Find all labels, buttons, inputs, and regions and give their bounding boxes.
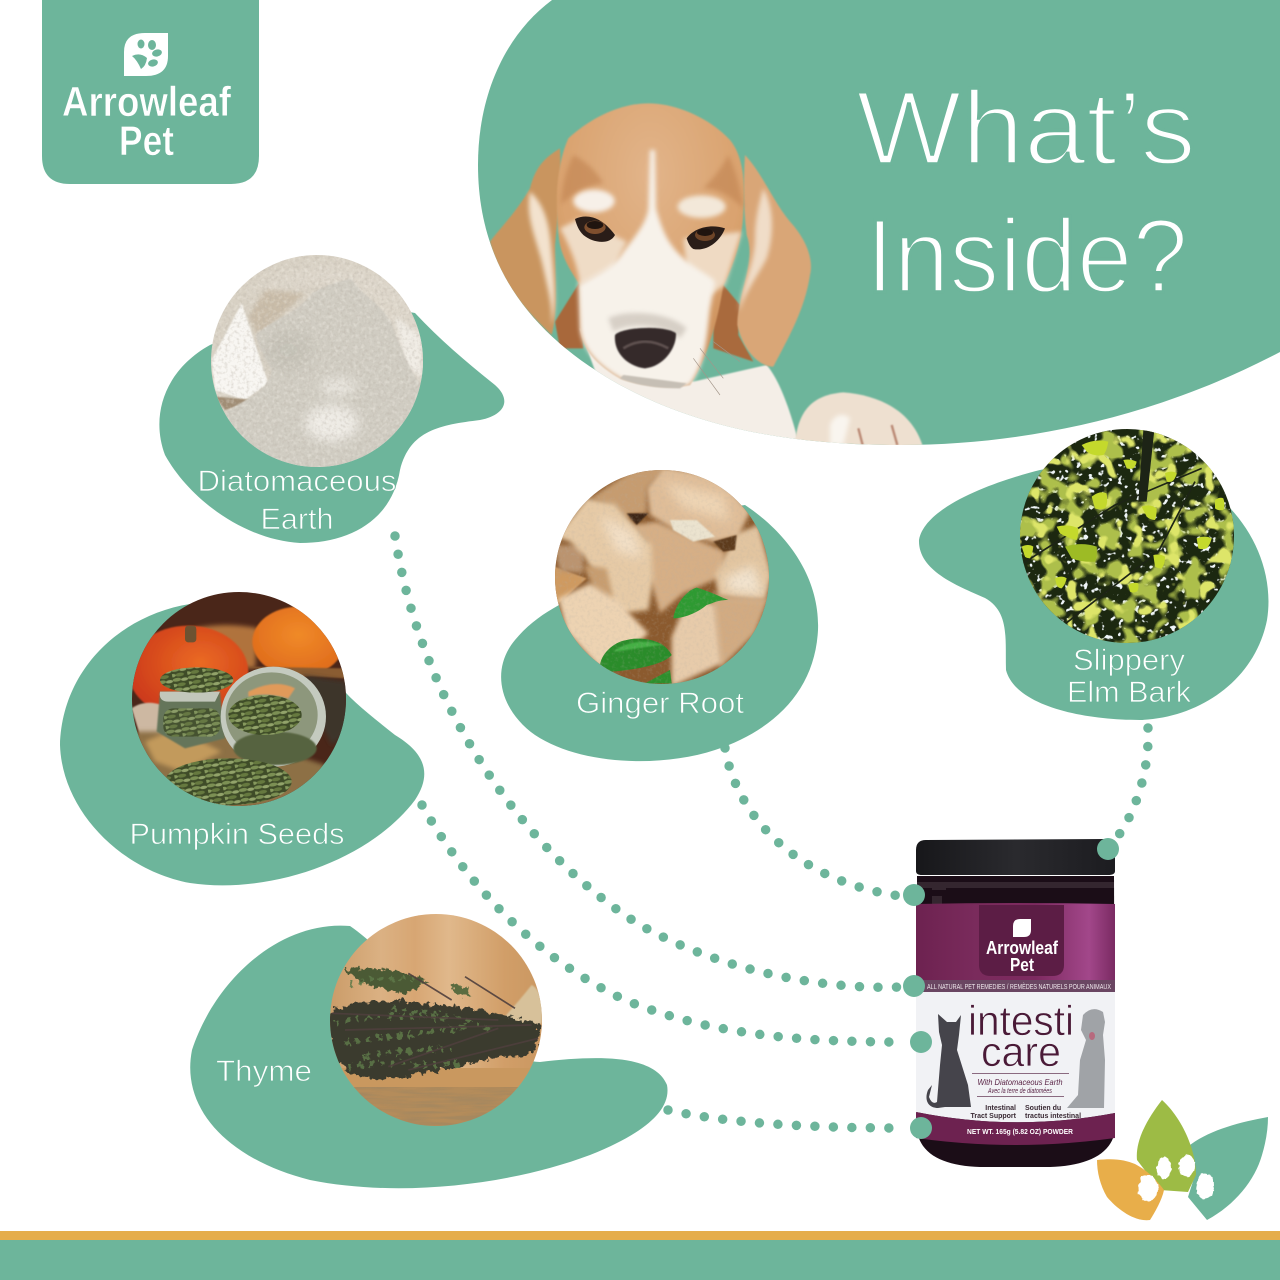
photo: powder (211, 255, 423, 467)
icon: three leaf paw emblem (1097, 1100, 1268, 1220)
green leaf (1137, 1100, 1196, 1192)
end dot earth (903, 975, 925, 997)
brand word: Pet: Pet (119, 117, 174, 164)
connector end dots (903, 838, 1119, 1139)
benefit en line 1: Intestinal (985, 1105, 1016, 1112)
label line 1: Slippery (1073, 644, 1185, 677)
blob (501, 505, 818, 761)
footer band (0, 1231, 1280, 1280)
rule top (972, 1073, 1069, 1074)
icon: jar leaf (1013, 919, 1031, 937)
badge background (42, 0, 259, 184)
label logo patch (979, 905, 1064, 976)
jar lid (916, 839, 1115, 875)
subtitle french: Avec la terre de diatomées (987, 1088, 1052, 1095)
product name line 2: care (981, 1028, 1061, 1075)
product name line 1: intesti (968, 997, 1074, 1044)
photo: pumpkin seeds (132, 592, 346, 806)
label: Thyme (216, 1055, 312, 1088)
label: Ginger Root (576, 687, 745, 720)
net weight: NET WT. 165g (5.82 OZ) POWDER (967, 1127, 1074, 1136)
jar subtitle (972, 1073, 1069, 1097)
product name (968, 997, 1074, 1075)
dotted connectors (395, 536, 1148, 1128)
title line: Inside?: Inside? (866, 198, 1188, 315)
end dot pumpkin (910, 1031, 932, 1053)
jar brand line 1: Arrowleaf (986, 938, 1059, 958)
jar benefits (970, 1105, 1081, 1120)
paw marks (132, 40, 163, 69)
icon: leaf with paw (124, 33, 168, 76)
ingredient: Thyme (190, 910, 668, 1188)
blob (60, 604, 424, 885)
end dot ginger (903, 884, 925, 906)
connector: Pumpkin Seeds to jar (422, 805, 905, 1042)
teal leaf (1188, 1117, 1268, 1220)
label (1067, 644, 1192, 709)
jar glass body (917, 876, 1115, 1167)
end dot elm (1097, 838, 1119, 860)
white paw marks (1138, 1155, 1214, 1201)
photo: elm leaves (1015, 425, 1240, 650)
label line 2: Earth (260, 503, 334, 536)
blob (190, 926, 668, 1188)
blob (159, 309, 504, 543)
jar dog (1067, 1009, 1105, 1108)
connector: Slippery Elm Bark to jar (1115, 728, 1148, 840)
header blob with title and dog (478, 0, 1280, 448)
connector: Ginger Root to jar (725, 748, 900, 896)
ingredient: Pumpkin Seeds (60, 585, 424, 885)
ingredient: Ginger Root (501, 465, 818, 761)
photo: ginger (550, 465, 775, 690)
label: Pumpkin Seeds (130, 818, 344, 851)
jar dog mouth (1089, 1032, 1095, 1040)
jar label purple top (916, 903, 1115, 990)
ingredient: Slippery Elm Bark (919, 425, 1268, 720)
tagline: ALL NATURAL PET REMEDIES / REMÈDES NATURELS POUR ANIMAUX (927, 982, 1111, 991)
jar neck highlights (917, 882, 1114, 904)
label line 1: Diatomaceous (198, 465, 396, 498)
title (856, 70, 1196, 315)
orange leaf (1097, 1159, 1164, 1220)
label (198, 465, 396, 536)
label purple bottom (916, 1112, 1115, 1145)
ingredient: Diatomaceous Earth (159, 250, 504, 543)
jar cat (926, 1014, 971, 1108)
rule bottom (977, 1096, 1064, 1097)
subtitle english: With Diatomaceous Earth (978, 1077, 1063, 1087)
title line: What's: What’s (856, 70, 1196, 187)
benefit en line 2: Tract Support (970, 1113, 1017, 1120)
label white panel (916, 991, 1115, 1122)
label tagline strip (916, 980, 1115, 992)
logo badge (42, 0, 259, 184)
end dot thyme (910, 1117, 932, 1139)
brand word: Arrowleaf: Arrowleaf (62, 78, 232, 125)
connector: Thyme to jar (668, 1110, 905, 1128)
header blob shape (478, 0, 1280, 445)
photo: beagle dog (490, 103, 923, 448)
leaf shape (124, 33, 168, 76)
brand name (62, 78, 232, 164)
jar brand line 2: Pet (1010, 955, 1034, 975)
benefit fr line 1: Soutien du (1025, 1105, 1061, 1112)
jar brand (986, 938, 1059, 975)
blob (919, 463, 1268, 720)
photo: thyme (330, 914, 542, 1126)
label line 2: Elm Bark (1067, 676, 1192, 709)
benefit fr line 2: tractus intestinal (1025, 1113, 1081, 1120)
connector: Diatomaceous Earth to jar (395, 536, 900, 987)
product jar (916, 839, 1115, 1167)
